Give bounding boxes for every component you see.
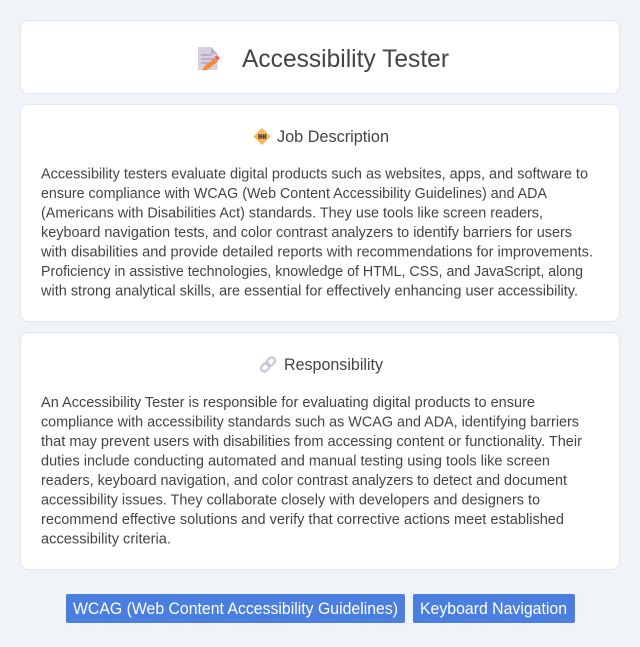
- heading: job description: Job Description: [277, 128, 389, 146]
- tag: keyboard navigation: Keyboard Navigation: [420, 599, 567, 618]
- panel: title header: [20, 20, 620, 94]
- panel: responsibility: [20, 332, 620, 570]
- tag: WCAG: [66, 594, 405, 623]
- text block: responsibility: that may prevent users with disabilities from accessing content or functionality. Their: [41, 434, 582, 450]
- text block: responsibility: [41, 395, 582, 548]
- text block: job description: with strong analytical skills, are essential for effectively enhancing user accessibility.: [40, 284, 578, 300]
- text block: responsibility: accessibility issues. They collaborate closely with developers and designers to: [41, 492, 540, 508]
- text block: job description: [40, 166, 593, 300]
- text block: job description: ensure compliance with WCAG (Web Content Accessibility Guidelines) and ADA: [41, 186, 547, 202]
- text block: job description: Accessibility testers evaluate digital products such as websites, apps, and software to: [41, 166, 588, 182]
- text block: responsibility: accessibility criteria.: [41, 532, 171, 548]
- heading: responsibility: Responsibility: [284, 356, 384, 374]
- text block: responsibility: compliance with accessibility standards such as WCAG and ADA, identifying barriers: [41, 414, 579, 430]
- tag: keyboard navigation: [413, 594, 575, 623]
- text block: job description: Proficiency in assistive technologies, knowledge of HTML, CSS, and JavaScript, along: [41, 264, 583, 280]
- title: Accessibility Tester: [242, 45, 449, 73]
- icon: chain link: [260, 356, 276, 373]
- text block: responsibility: readers, keyboard navigation, and color contrast analyzers to detect and document: [41, 473, 567, 489]
- text block: job description: (Americans with Disabilities Act) standards. They use tools like screen readers,: [41, 206, 543, 222]
- text block: responsibility: recommend effective solutions and verify that corrective actions meet established: [41, 512, 564, 528]
- text block: responsibility: duties include conducting automated and manual testing using tools like screen: [41, 454, 550, 470]
- panel: job description: [20, 104, 620, 322]
- text block: job description: keyboard navigation tests, and color contrast analyzers to identify barriers for users: [41, 225, 572, 241]
- tag: WCAG: WCAG (Web Content Accessibility Guidelines): [73, 599, 398, 618]
- text block: job description: with disabilities and provide detailed reports with recommendations for improvements.: [40, 244, 593, 260]
- text block: responsibility: An Accessibility Tester is responsible for evaluating digital products to ensure: [41, 395, 535, 411]
- icon: orange diamond: [254, 128, 270, 145]
- icon: document with pencil: [198, 47, 220, 70]
